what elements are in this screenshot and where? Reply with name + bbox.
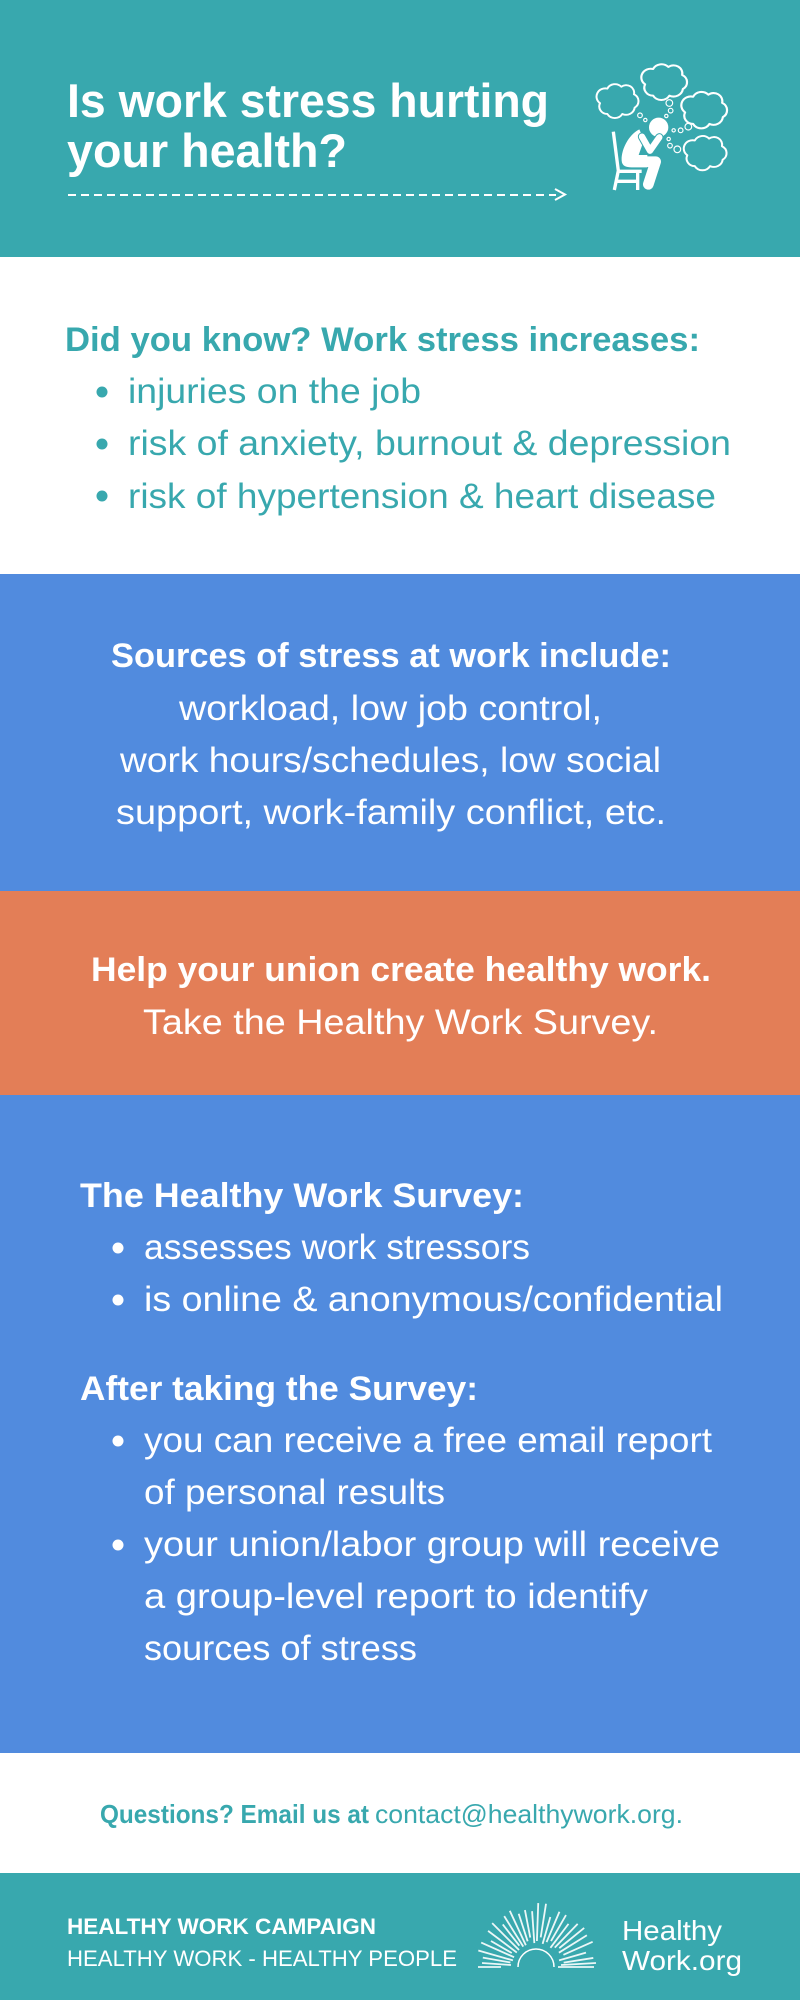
- list: after the survey: of personal results: [144, 1473, 445, 1512]
- heading: sources of stress: Sources of stress at work include:: [111, 637, 671, 675]
- list: after the survey: a group-level report to identify: [144, 1577, 649, 1616]
- list: after the survey: sources of stress: [144, 1629, 417, 1668]
- text: healthy work logo: [622, 1915, 742, 1976]
- list: work stress effects: risk of hypertension & heart disease: [128, 477, 716, 516]
- heading: the healthy work survey: The Healthy Work Survey:: [80, 1177, 524, 1215]
- title: [67, 74, 549, 177]
- text: sources list: workload, low job control,: [178, 689, 602, 728]
- list: survey facts: is online & anonymous/confidential: [144, 1280, 723, 1319]
- panel: sources of stress: [0, 574, 800, 891]
- list: after the survey: your union/labor group will receive: [144, 1525, 720, 1564]
- panel: contact: [0, 1753, 800, 1873]
- panel: did you know: [0, 257, 800, 574]
- list: work stress effects: risk of anxiety, burnout & depression: [128, 424, 731, 463]
- list: after the survey: [112, 1421, 720, 1668]
- list: work stress effects: [96, 372, 731, 516]
- list: work stress effects: injuries on the job: [128, 372, 421, 411]
- text: sources list: [116, 689, 666, 832]
- text: healthy work logo: Work.org: [622, 1945, 742, 1976]
- list: survey facts: assesses work stressors: [144, 1228, 530, 1267]
- list: survey facts: [112, 1228, 723, 1319]
- text: take the survey: Take the Healthy Work Survey.: [143, 1003, 658, 1042]
- panel: call to action: [0, 891, 800, 1095]
- text: healthy work logo: Healthy: [622, 1915, 722, 1946]
- heading: call to action: Help your union create healthy work.: [91, 951, 711, 989]
- text: sources list: work hours/schedules, low social: [119, 741, 661, 780]
- title: your health?: [67, 124, 347, 177]
- dashed arrow: [68, 189, 565, 200]
- text: questions email: contact@healthywork.org.: [375, 1799, 683, 1829]
- icon: sunburst logo: [478, 1903, 596, 1967]
- list: after the survey: you can receive a free email report: [144, 1421, 712, 1460]
- heading: did you know: Did you know? Work stress increases:: [65, 321, 700, 359]
- text: campaign tagline: HEALTHY WORK - HEALTHY PEOPLE: [67, 1946, 457, 1971]
- text: questions email: [100, 1799, 683, 1829]
- panel: footer: [0, 1873, 800, 2000]
- text: questions email: Questions? Email us at: [100, 1799, 369, 1829]
- panel: survey details: [0, 1095, 800, 1753]
- text: sources list: support, work-family conflict, etc.: [116, 793, 666, 832]
- text: campaign name: HEALTHY WORK CAMPAIGN: [67, 1914, 376, 1939]
- panel: header: [0, 0, 800, 257]
- icon: person thinking with thought clouds: [597, 64, 727, 190]
- heading: after taking the survey: After taking the Survey:: [80, 1370, 478, 1408]
- title: Is work stress hurting: [67, 74, 549, 127]
